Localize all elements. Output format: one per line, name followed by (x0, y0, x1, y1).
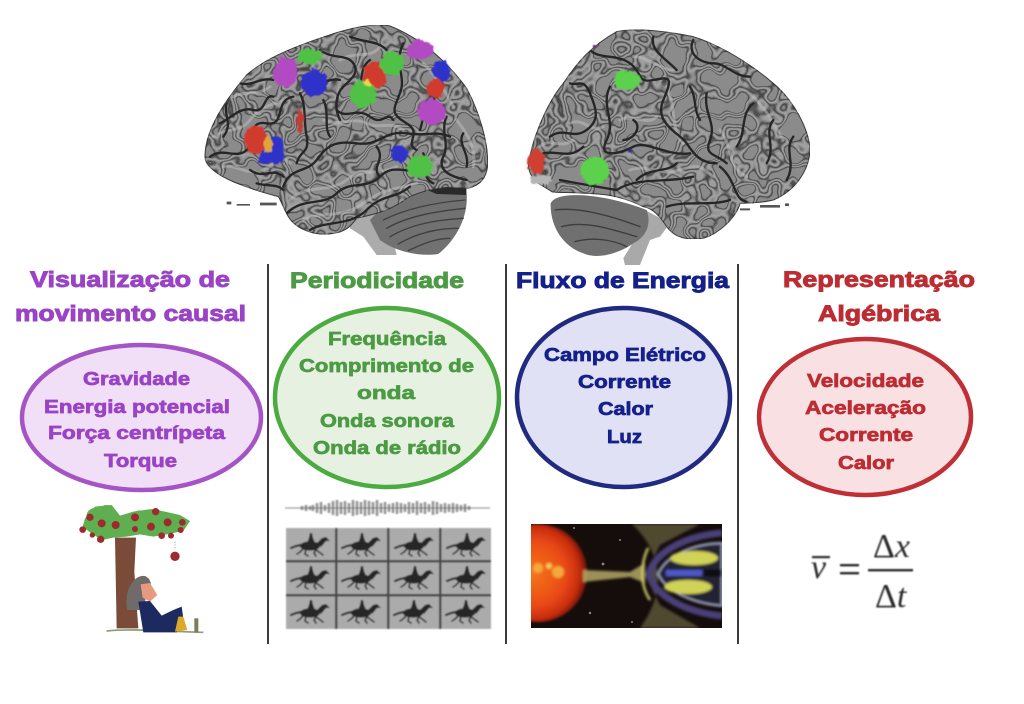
divider lines (267, 264, 739, 644)
body (138, 601, 183, 632)
ellipse: concepts purple: Energia potencial (44, 397, 230, 417)
heading: visualização de movimento causal: movimento causal (15, 301, 246, 326)
ellipse: concepts blue (517, 308, 730, 487)
apples (79, 508, 186, 561)
sun (531, 524, 588, 624)
ellipse: concepts purple: Gravidade (83, 369, 190, 389)
ellipse: concepts purple (22, 345, 261, 490)
ellipse: concepts green: Frequência (328, 329, 447, 349)
equation: average velocity: v (811, 549, 827, 586)
panel: visualização de movimento causal (15, 267, 261, 632)
equation: average velocity: Δt (875, 578, 908, 615)
book (194, 618, 198, 632)
temporal fragments (740, 203, 789, 210)
illustration: newton under apple tree (79, 505, 203, 632)
brain image: right hemisphere (528, 30, 810, 265)
radiation lobes (670, 551, 718, 565)
brain stem (347, 210, 397, 255)
sound waveform (285, 500, 490, 516)
ellipse: concepts purple: Torque (104, 451, 177, 471)
panel: representação algébrica (759, 267, 975, 615)
ellipse: concepts blue: Calor (598, 399, 653, 419)
equation: average velocity: Δx (873, 528, 910, 565)
heading: visualização de movimento causal (15, 267, 246, 326)
cerebellum (370, 186, 467, 255)
activation patches (529, 44, 639, 185)
heading: representação algébrica (783, 267, 975, 326)
shoe (175, 617, 187, 632)
activation patches (244, 41, 451, 179)
trunk (115, 538, 138, 628)
cerebral cortex (205, 25, 488, 234)
canopy (83, 505, 190, 540)
ellipse: concepts green: Onda sonora (320, 411, 455, 431)
olive glow (632, 524, 700, 628)
heading: representação algébrica: Representação (783, 267, 975, 292)
photo grid: running horse sequence (286, 528, 491, 629)
ellipse: concepts red (759, 339, 971, 495)
ellipse: concepts blue: Luz (607, 427, 642, 447)
panel: periodicidade (275, 268, 499, 629)
hair (126, 576, 151, 610)
ellipse: concepts green: Comprimento de (299, 356, 474, 376)
brain stem (623, 210, 670, 265)
heading: representação algébrica: Algébrica (818, 301, 941, 326)
bow shock (642, 548, 650, 600)
ellipse: concepts purple: Força centrípeta (48, 423, 226, 443)
ellipse: concepts red: Velocidade (807, 371, 924, 391)
ellipse: concepts green (275, 308, 499, 487)
magnetosphere (649, 533, 722, 616)
heading: periodicidade: Periodicidade (290, 268, 464, 293)
ellipse: concepts red: Corrente (819, 425, 913, 445)
heading: fluxo de energia: Fluxo de Energia (516, 268, 730, 293)
ellipse: concepts blue: Campo Elétrico (544, 345, 706, 365)
core (666, 570, 702, 576)
solar wind (583, 563, 645, 583)
panel: fluxo de energia (514, 272, 732, 628)
ellipse: concepts blue: Corrente (578, 372, 671, 392)
cerebellum (551, 195, 649, 256)
ellipse: concepts red: Aceleração (805, 398, 926, 418)
brain image: left hemisphere (205, 25, 488, 255)
heading: visualização de movimento causal: Visualização de (30, 267, 230, 292)
cerebral cortex (528, 30, 810, 239)
face (141, 583, 157, 602)
temporal fragments (227, 202, 277, 206)
ground (107, 630, 203, 632)
ellipse: concepts green: Onda de rádio (313, 438, 461, 458)
image: sun and magnetosphere (531, 524, 722, 628)
ellipse: concepts red: Calor (838, 453, 894, 473)
stars (573, 527, 633, 623)
equation: average velocity (811, 528, 913, 615)
ellipse: concepts green: onda (357, 383, 416, 403)
